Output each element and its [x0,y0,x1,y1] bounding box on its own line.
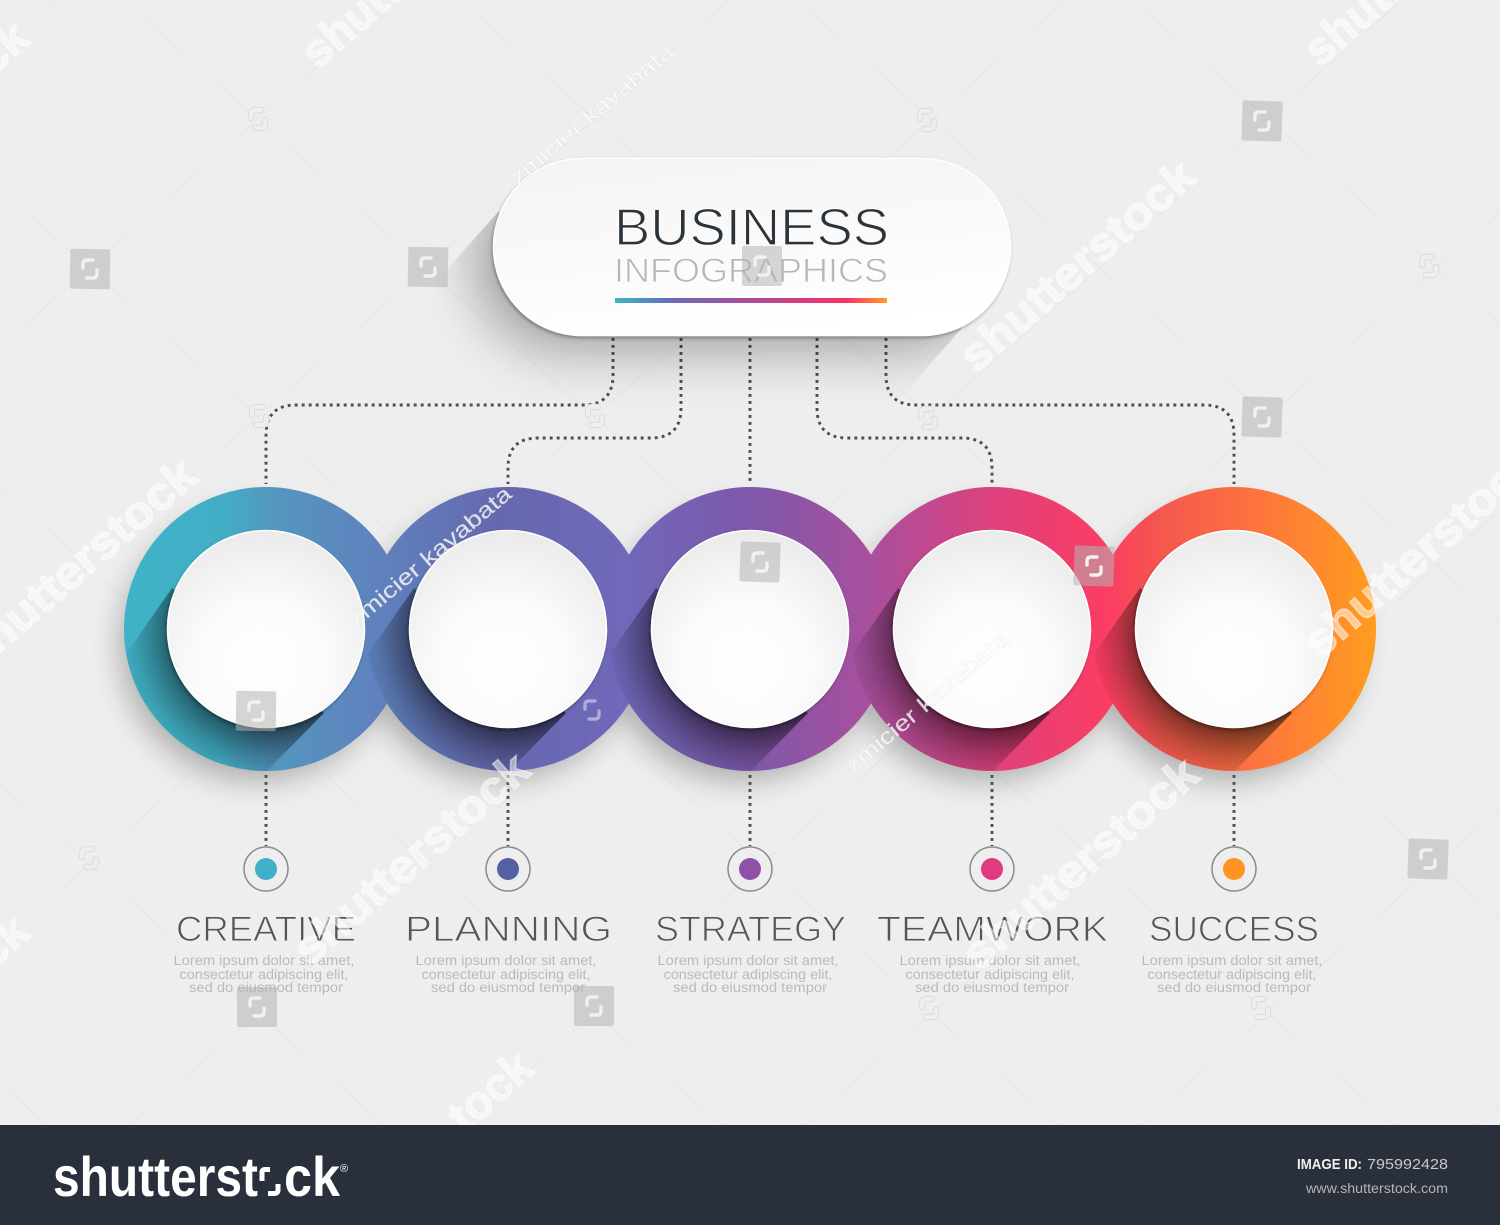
step 4 marker and text: TEAMWORK [877,910,1108,949]
step 5 marker and text: consectetur adipiscing elit, [1148,967,1316,982]
step 1 marker and text: consectetur adipiscing elit, [180,967,348,982]
step 3 marker and text: consectetur adipiscing elit, [664,967,832,982]
footer bar [0,1125,1500,1225]
step 5 marker and text: SUCCESS [1149,910,1319,949]
header pill long shadow [474,172,992,350]
watermark: shutterstock text: shutterstock [948,148,1206,382]
ring 2: planning [368,487,629,771]
ring 5: success [1094,487,1376,771]
step 4 marker and text [877,775,1108,995]
footer logo: ® [340,1163,348,1175]
website url: www.shutterstock.com [1305,1180,1448,1196]
image id number: 795992428 [1367,1156,1448,1173]
title: BUSINESS: BUSINESS [614,199,889,257]
dotted connectors: header to rings [266,338,1234,484]
step 2 marker and text: PLANNING [405,910,612,949]
step 4 marker and text: consectetur adipiscing elit, [906,967,1074,982]
step 5 marker and text: sed do eiusmod tempor [1157,980,1312,995]
step 2 marker and text: consectetur adipiscing elit, [422,967,590,982]
ring 1: creative [124,487,387,771]
soft ground shadows of rings [120,509,1360,781]
watermark: shutterstock text: shutterstock [282,741,540,975]
watermark: contributor name: zmicier kavabata [343,480,517,632]
watermark: shutterstock text: shutterstock [951,746,1209,980]
watermark: contributor name: zmicier kavabata [505,38,679,190]
watermark: shutterstock text: tock [437,1040,543,1142]
watermark: square marks [70,100,1449,1027]
step 3 marker and text: STRATEGY [655,910,846,949]
step 1 marker and text [174,775,356,995]
footer logo: o [258,1145,284,1208]
ring 3: strategy [610,487,871,771]
step 4 marker and text: sed do eiusmod tempor [915,980,1070,995]
step 4 marker and text: Lorem ipsum dolor sit amet, [900,953,1080,968]
footer logo: ck [284,1145,341,1208]
step 3 marker and text [655,775,846,995]
step 2 marker and text: Lorem ipsum dolor sit amet, [416,953,596,968]
image id: IMAGE ID: [1297,1156,1362,1173]
step 1 marker and text: sed do eiusmod tempor [189,980,344,995]
step 1 marker and text: Lorem ipsum dolor sit amet, [174,953,354,968]
step 3 marker and text: sed do eiusmod tempor [673,980,828,995]
step 2 marker and text: sed do eiusmod tempor [431,980,586,995]
header pill [494,158,1010,336]
watermark: contributor name [343,38,1014,778]
step 5 marker and text [1142,775,1322,995]
footer logo: shutterst [53,1145,258,1208]
step 5 marker and text: Lorem ipsum dolor sit amet, [1142,953,1322,968]
step 3 marker and text: Lorem ipsum dolor sit amet, [658,953,838,968]
watermark: contributor name: zmicier kavabata [840,626,1014,778]
step 1 marker and text: CREATIVE [176,910,356,949]
ring 4: teamwork [853,487,1113,771]
gradient underline [615,298,887,303]
subtitle: INFOGRAPHICS: INFOGRAPHICS [614,252,888,290]
step 2 marker and text [405,775,612,995]
